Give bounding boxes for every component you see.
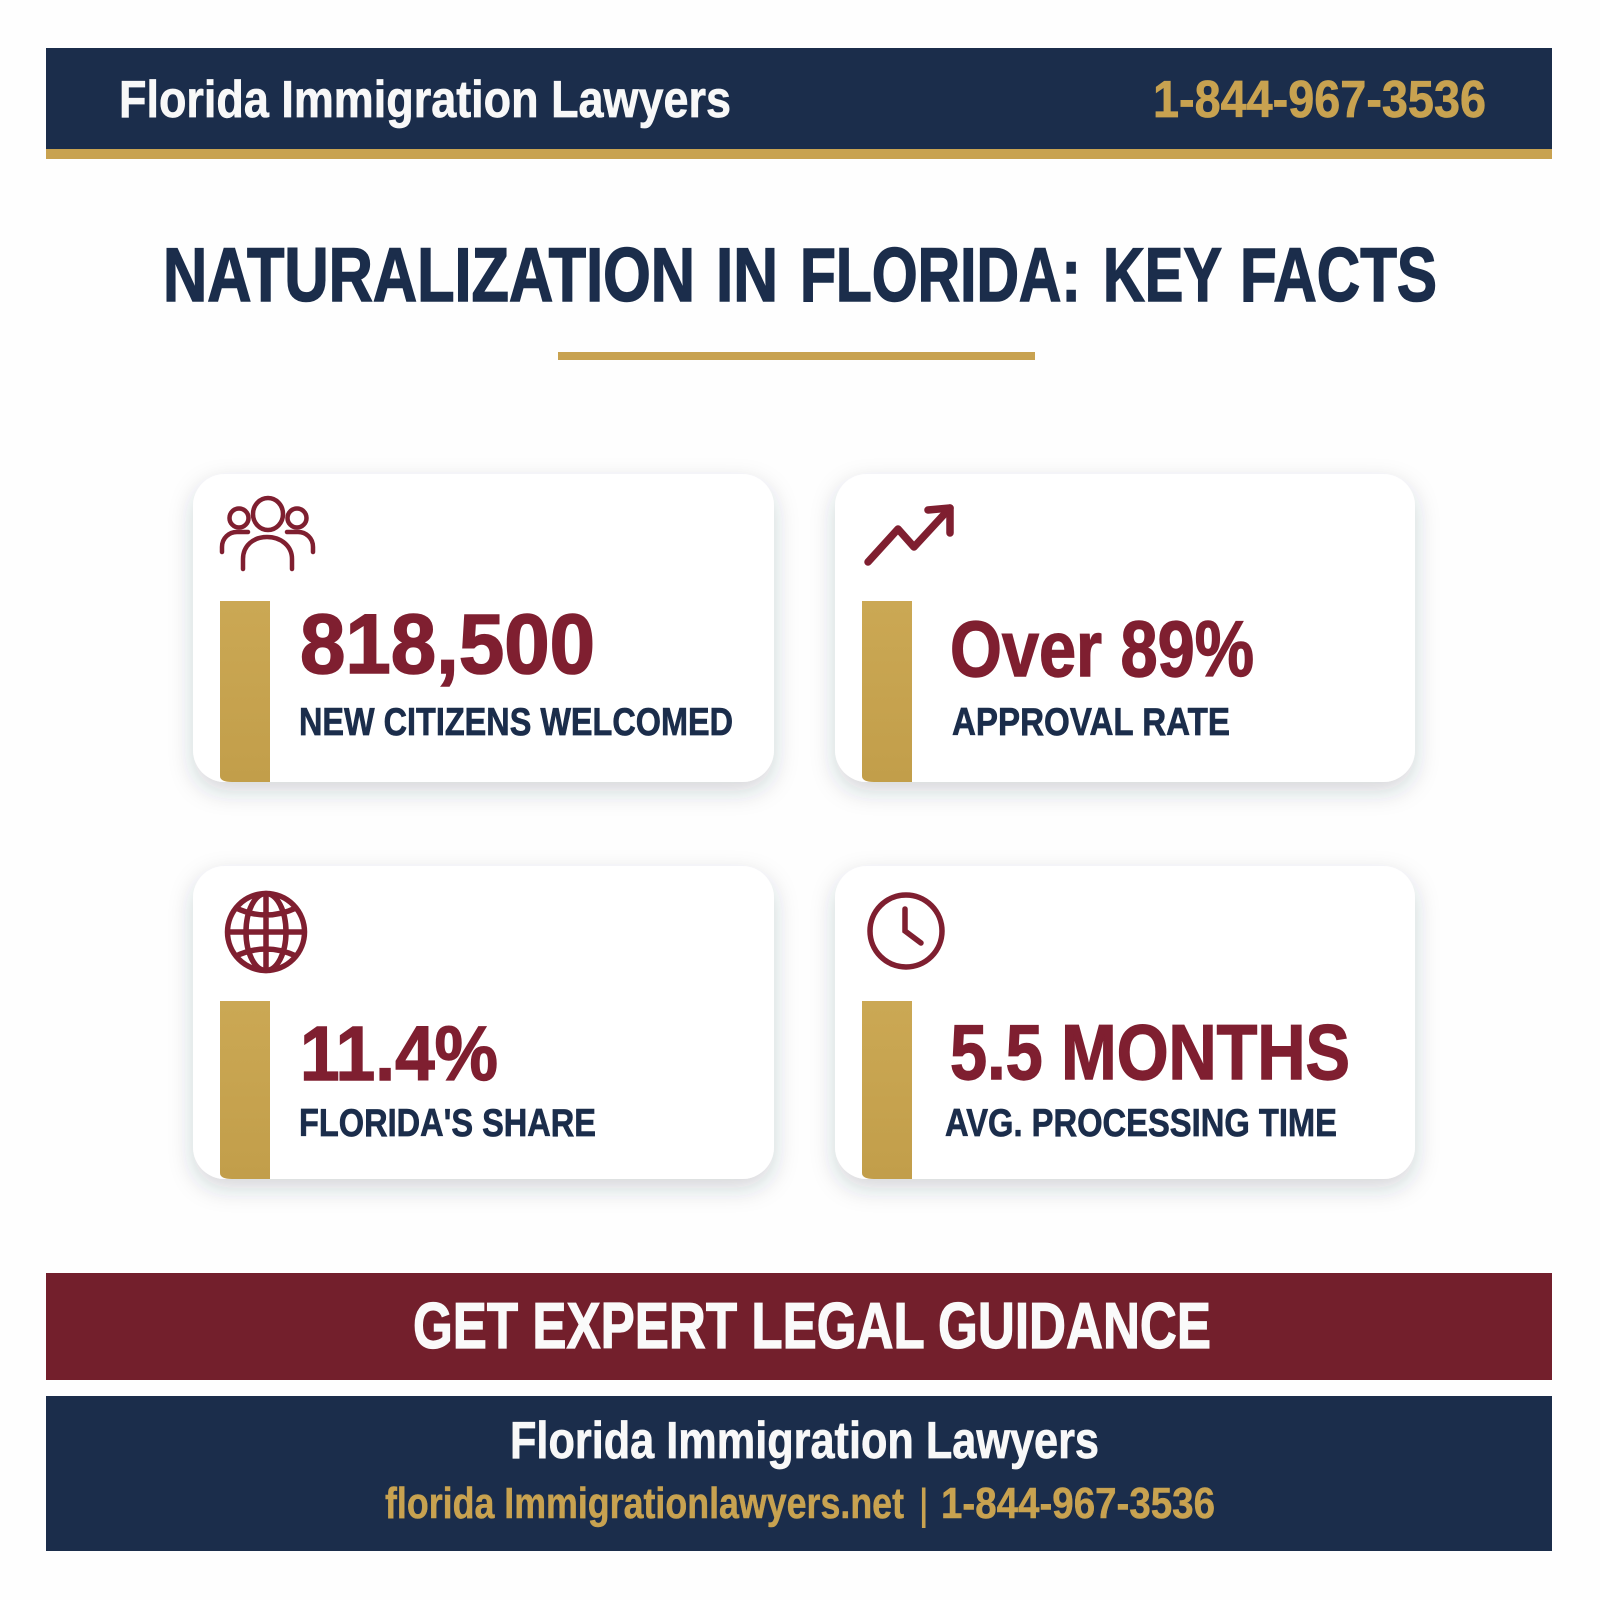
stat value: 5.5 MONTHS (950, 1008, 1350, 1096)
footer firm name: Florida Immigration Lawyers (510, 1412, 1099, 1470)
title: NATURALIZATION (163, 233, 695, 318)
title: FLORIDA: (800, 233, 1081, 318)
icon: rising trend arrow (868, 508, 950, 562)
footer band (46, 1396, 1552, 1551)
footer website and phone: florida Immigrationlawyers.net (385, 1479, 904, 1528)
call to action text: GET EXPERT LEGAL GUIDANCE (413, 1289, 1211, 1362)
stat label: FLORIDA'S SHARE (299, 1102, 596, 1145)
panel: approval rate (835, 474, 1415, 782)
accent bar (220, 1001, 270, 1179)
header phone number: 1-844-967-3536 (1153, 71, 1486, 129)
stat value: 818,500 (300, 597, 595, 691)
icon: clock (870, 895, 942, 967)
call to action band (46, 1273, 1552, 1380)
panel: new citizens (193, 474, 774, 782)
footer website and phone: | (918, 1480, 929, 1529)
title: IN (716, 233, 778, 318)
stat label: NEW CITIZENS WELCOMED (299, 701, 733, 744)
stat value: 11.4% (300, 1011, 498, 1097)
stat label: AVG. PROCESSING TIME (945, 1102, 1337, 1145)
title: KEY (1103, 233, 1222, 318)
icon: globe (228, 894, 305, 971)
stat value: Over 89% (950, 604, 1254, 693)
panel: Florida's share (193, 866, 774, 1179)
stat label: APPROVAL RATE (952, 701, 1230, 744)
panel: processing time (835, 866, 1415, 1179)
accent bar (862, 1001, 912, 1179)
title: FACTS (1240, 233, 1437, 318)
accent bar (220, 601, 270, 782)
title (163, 233, 1437, 318)
header band (46, 48, 1552, 159)
header firm name: Florida Immigration Lawyers (119, 71, 731, 129)
footer website and phone: 1-844-967-3536 (941, 1479, 1215, 1528)
accent bar (862, 601, 912, 782)
icon: people (222, 498, 313, 569)
title underline (558, 352, 1035, 360)
